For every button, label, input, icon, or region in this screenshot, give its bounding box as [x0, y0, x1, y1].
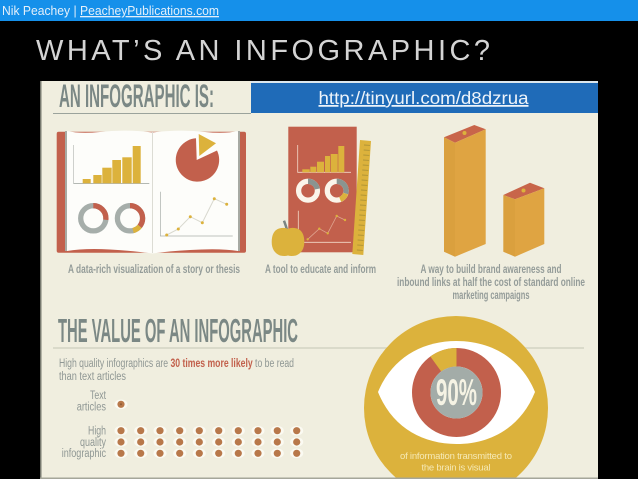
paragraph: 30 times more likely: than text articles	[59, 371, 126, 383]
caption: brand awareness: A way to build brand awareness and	[420, 264, 562, 276]
line chart	[160, 192, 233, 236]
icon: short stack of coins	[503, 183, 544, 257]
panel: infographic	[40, 78, 598, 479]
icon: tall stack of coins	[444, 125, 486, 257]
caption: tool: A tool to educate and inform	[265, 264, 376, 276]
eye graphic: 90%	[364, 316, 548, 479]
pie chart	[176, 134, 219, 182]
dot chart labels	[62, 390, 107, 460]
clipboard line chart	[298, 211, 351, 242]
caption: brain is visual: of information transmitted to	[400, 451, 512, 462]
caption: brain is visual	[400, 451, 512, 474]
dot chart labels: quality	[80, 437, 106, 449]
icon: open book with charts	[57, 131, 246, 254]
dot chart: high quality infographic	[114, 426, 303, 458]
bar chart	[73, 145, 149, 184]
header bar: Nik Peachey | PeacheyPublications.com	[2, 3, 219, 18]
paragraph: 30 times more likely	[59, 358, 294, 383]
icon: tool with clipboard, ruler and apple	[272, 127, 371, 256]
dot chart: text articles	[114, 400, 128, 409]
clipboard bars	[298, 145, 351, 172]
title: WHAT’S AN INFOGRAPHIC?	[36, 35, 490, 67]
apple	[272, 221, 304, 256]
dot chart labels: High	[88, 426, 106, 438]
link box: http://tinyurl.com/d8dzrua	[318, 88, 529, 108]
header bar	[0, 0, 638, 21]
clipboard donuts	[299, 181, 346, 200]
value: 90%: 90%	[436, 372, 477, 413]
caption: book: A data-rich visualization of a story or thesis	[68, 264, 240, 276]
dot chart labels: infographic	[62, 448, 106, 460]
caption: brain is visual: the brain is visual	[422, 462, 490, 474]
donut charts	[81, 206, 143, 231]
dot chart labels: Text	[90, 390, 107, 402]
caption: brand awareness	[397, 264, 585, 302]
paragraph: 30 times more likely: High quality infographics are 30 times more likely to be read	[59, 358, 294, 370]
caption: brand awareness: marketing campaigns	[452, 290, 530, 302]
panel: infographic: THE VALUE OF AN INFOGRAPHIC	[58, 312, 298, 349]
ruler	[352, 140, 371, 255]
dot chart labels: articles	[77, 402, 106, 414]
link box	[251, 81, 598, 113]
panel: infographic: AN INFOGRAPHIC IS:	[59, 78, 214, 114]
